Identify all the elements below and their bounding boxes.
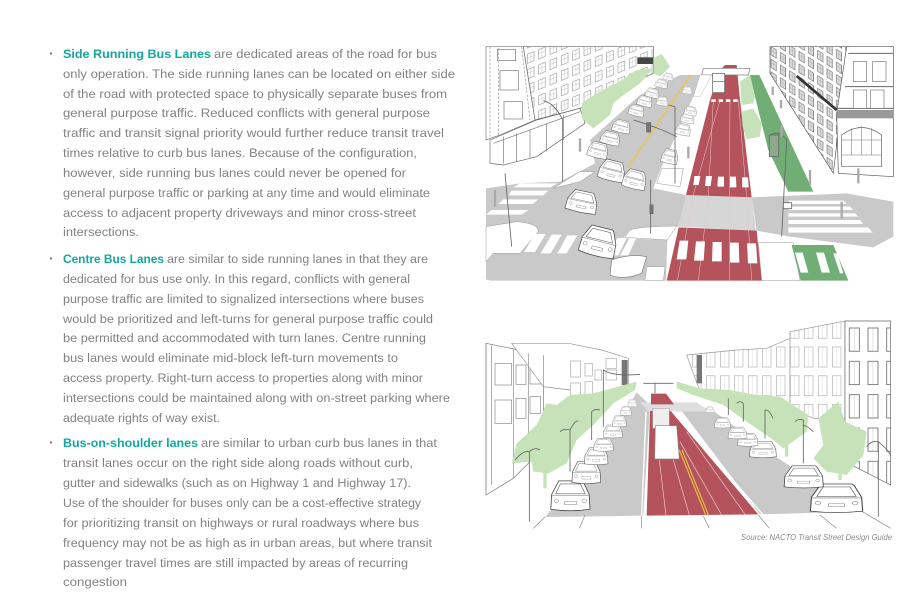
signal poles and pedestrians: [495, 87, 858, 247]
right buildings: [687, 321, 891, 485]
text block: side running bus lanes: intersections.: [63, 225, 139, 239]
text block: centre bus lanes: purpose traffic are limited to signalized intersections where buses: [63, 292, 424, 306]
station and bus: [693, 68, 750, 97]
text block: centre bus lanes: would be prioritized and left-turns for general purpose traffic could: [62, 312, 433, 326]
text block: side running bus lanes: of the road with protected space to physically separate buses from: [63, 87, 447, 101]
trees and storefront foliage: [512, 382, 867, 488]
red bus lanes: [647, 394, 758, 516]
crosswalks on grey road: [486, 183, 873, 255]
text block: centre bus lanes: Centre Bus Lanes: [63, 252, 164, 266]
parked and moving cars: [565, 72, 698, 260]
red bus lane: [667, 65, 762, 281]
text block: side running bus lanes: [50, 47, 455, 239]
text block: side running bus lanes: general purpose traffic or parking at any time and would eliminate: [63, 186, 430, 200]
gray roadway: [545, 392, 858, 517]
text block: bus-on-shoulder lanes: for prioritizing transit on highways or rural roadways where bus: [63, 516, 419, 530]
text block: bus-on-shoulder lanes: congestion: [63, 575, 127, 589]
source caption: Source: NACTO Transit Street Design Guide: [741, 532, 892, 542]
left buildings: [486, 47, 653, 165]
text block: side running bus lanes: access to adjacent property driveways and minor cross-street: [63, 206, 417, 220]
text block: centre bus lanes: bus lanes would eliminate mid-block left-turn movements to: [63, 351, 398, 365]
text block: bus-on-shoulder lanes: gutter and sidewalks (such as on Highway 1 and Highway 17).: [63, 476, 411, 490]
parked cars right: [706, 407, 863, 513]
lane lines and crosswalk bars: [677, 99, 757, 281]
text block: side running bus lanes: Side Running Bus Lanes: [63, 47, 211, 61]
text block: centre bus lanes: dedicated for bus use only. In this regard, conflicts with general: [63, 272, 410, 286]
text block: centre bus lanes: be permitted and accommodated with turn lanes. Centre running: [63, 331, 426, 345]
right buildings: [770, 47, 893, 177]
text block: centre bus lanes: intersections could be maintained along with on-street parking where: [63, 391, 450, 405]
green bike lane: [750, 75, 848, 281]
text block: bus-on-shoulder lanes: Bus-on-shoulder lanes: [63, 436, 198, 450]
sidewalk corners: [486, 47, 800, 281]
text block: centre bus lanes: are similar to side running lanes in that they are: [167, 252, 428, 266]
text block: bus-on-shoulder lanes: transit lanes occur on the right side along roads without curb,: [63, 456, 413, 470]
street lamps: [515, 370, 891, 522]
trees: [582, 54, 762, 139]
text block: side running bus lanes: general purpose traffic. Reduced conflicts with general purpose: [63, 106, 430, 120]
text block: bus-on-shoulder lanes: [50, 436, 438, 589]
light intersection surface: [679, 195, 756, 231]
text block: side running bus lanes: traffic and transit signal priority would further reduce transit travel: [63, 126, 444, 140]
text block: side running bus lanes: however, side running bus lanes could never be opened for: [63, 166, 406, 180]
lane markings: [533, 411, 891, 528]
text block: bus-on-shoulder lanes: frequency may not be as high as in urban areas, but where transit: [63, 536, 433, 550]
gray roadway: [486, 75, 893, 281]
text block: centre bus lanes: adequate rights of way exist.: [63, 411, 220, 425]
text block: side running bus lanes: are dedicated areas of the road for bus: [214, 47, 437, 61]
text block: side running bus lanes: only operation. The side running lanes can be located on either side: [63, 67, 455, 81]
text block: centre bus lanes: [50, 252, 450, 425]
illustration: centre bus lanes street: [486, 321, 891, 528]
bus: [653, 408, 679, 459]
text block: side running bus lanes: times relative to curb bus lanes. Because of the configuration,: [63, 146, 417, 160]
illustration: side running bus lanes intersection: [486, 47, 893, 281]
yellow centre line: [628, 75, 691, 167]
text block: centre bus lanes: access property. Right-turn access to properties along with minor: [63, 371, 423, 385]
text block: bus-on-shoulder lanes: passenger travel times are still impacted by areas of recurring: [63, 556, 408, 570]
text block: bus-on-shoulder lanes: Use of the shoulder for buses only can be a cost-effective strategy: [63, 496, 422, 510]
text block: bus-on-shoulder lanes: are similar to urban curb bus lanes in that: [201, 436, 438, 450]
parked cars left: [551, 400, 637, 511]
left buildings: [486, 343, 628, 495]
